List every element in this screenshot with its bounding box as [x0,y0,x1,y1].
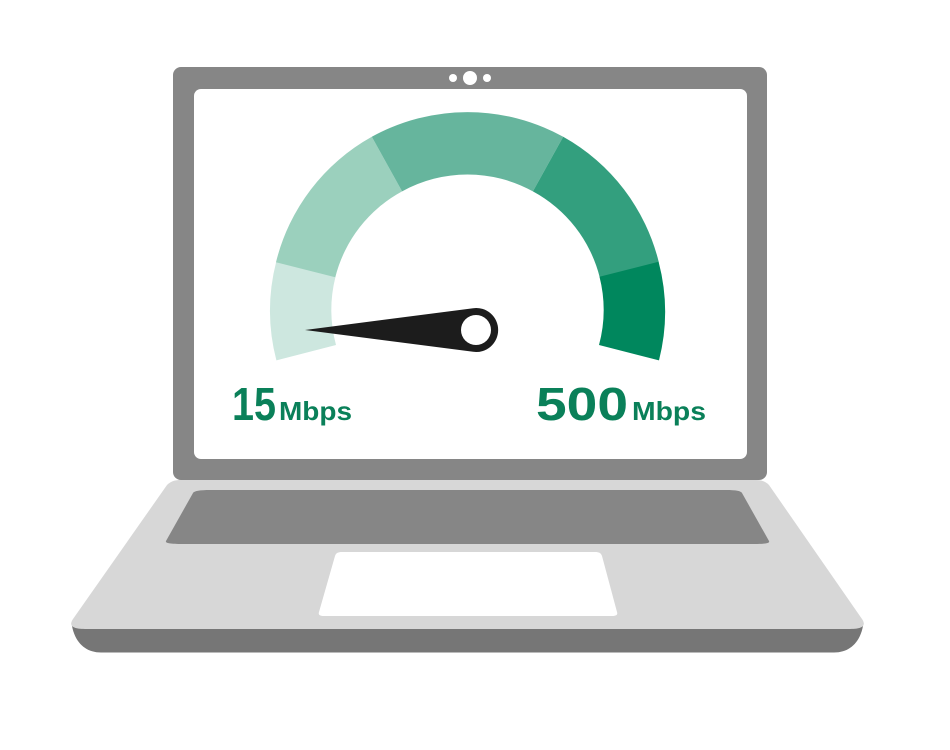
keyboard area [166,490,769,544]
label: 15 Mbps: Mbps [279,396,352,426]
laptop screen [194,89,747,459]
gauge segment 3 [372,112,563,191]
laptop base underside [72,626,863,652]
laptop base top deck [71,480,864,629]
webcam dots [449,71,491,85]
gauge segment 2 [276,137,402,277]
speed gauge [270,112,665,360]
gauge segment 4 [533,137,659,277]
laptop lid [173,67,767,480]
label: 500 Mbps [536,378,706,430]
label: 15 Mbps: 15 [232,378,276,430]
gauge segment 1 [270,262,336,360]
gauge segment 5 [599,262,665,360]
gauge needle [305,308,498,352]
trackpad [319,552,617,616]
label: 500 Mbps: Mbps [632,396,706,426]
label: 15 Mbps [232,378,352,430]
label: 500 Mbps: 500 [536,378,628,430]
